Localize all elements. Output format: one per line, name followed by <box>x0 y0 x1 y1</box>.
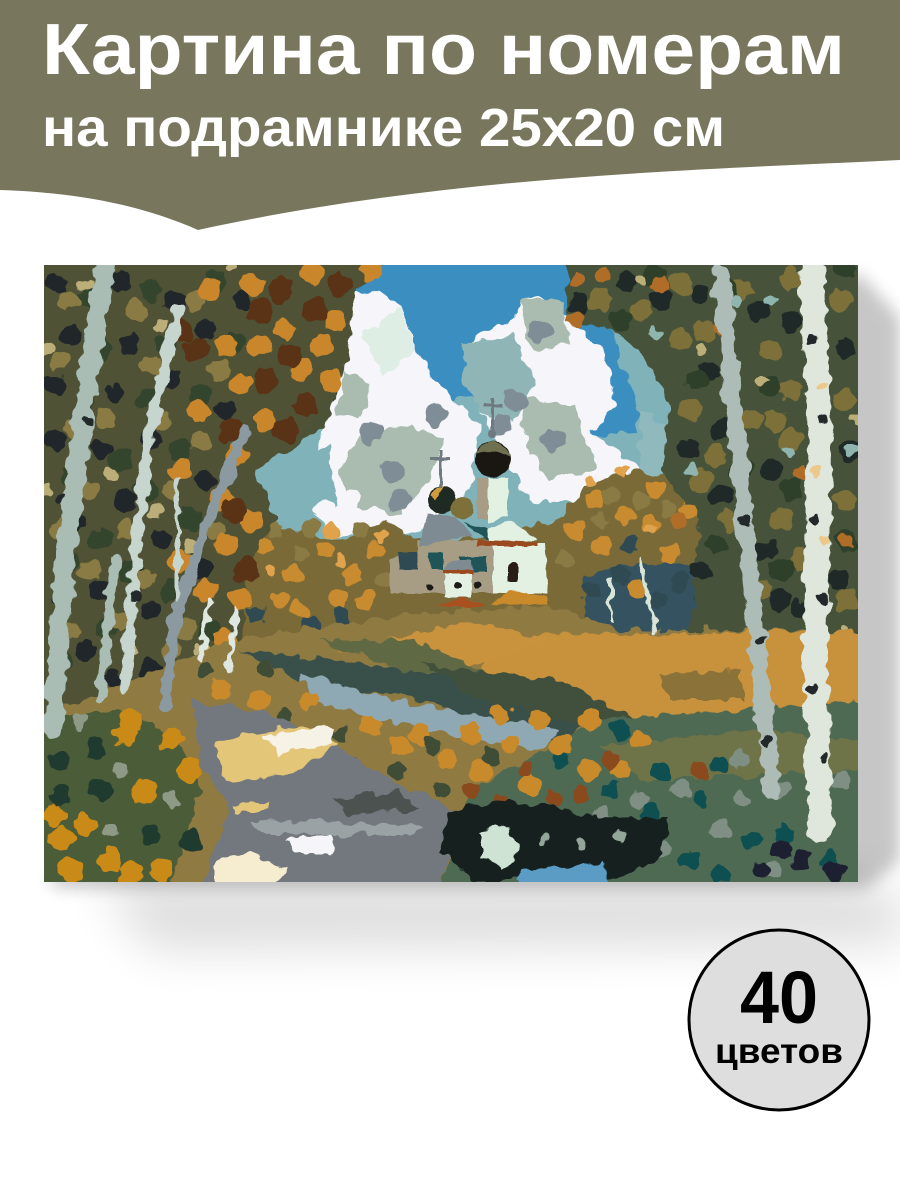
main body <box>417 540 493 593</box>
title: Картина по номерам <box>42 10 845 90</box>
banner <box>0 0 900 230</box>
clouds <box>312 290 667 538</box>
sky <box>254 265 672 540</box>
painting: autumn birch forest with church <box>35 255 870 890</box>
birch trunks <box>52 265 826 830</box>
right foliage <box>565 255 870 640</box>
badge circle <box>689 930 869 1110</box>
dark pond <box>440 800 670 885</box>
left foreground grass <box>35 710 200 890</box>
canvas shadow <box>46 272 900 950</box>
left wing <box>389 556 418 594</box>
small dome <box>428 486 456 514</box>
forest path <box>190 700 460 890</box>
left foliage <box>44 265 382 688</box>
badge number: 40 <box>740 956 818 1039</box>
bell tower <box>477 478 490 520</box>
distant tree line <box>240 470 760 640</box>
subtitle: на подрамнике 25х20 см <box>42 98 725 158</box>
badge label: цветов <box>715 1032 843 1071</box>
badge: 40 colours <box>689 930 869 1110</box>
church <box>390 397 548 607</box>
ground and golden field <box>35 605 870 890</box>
